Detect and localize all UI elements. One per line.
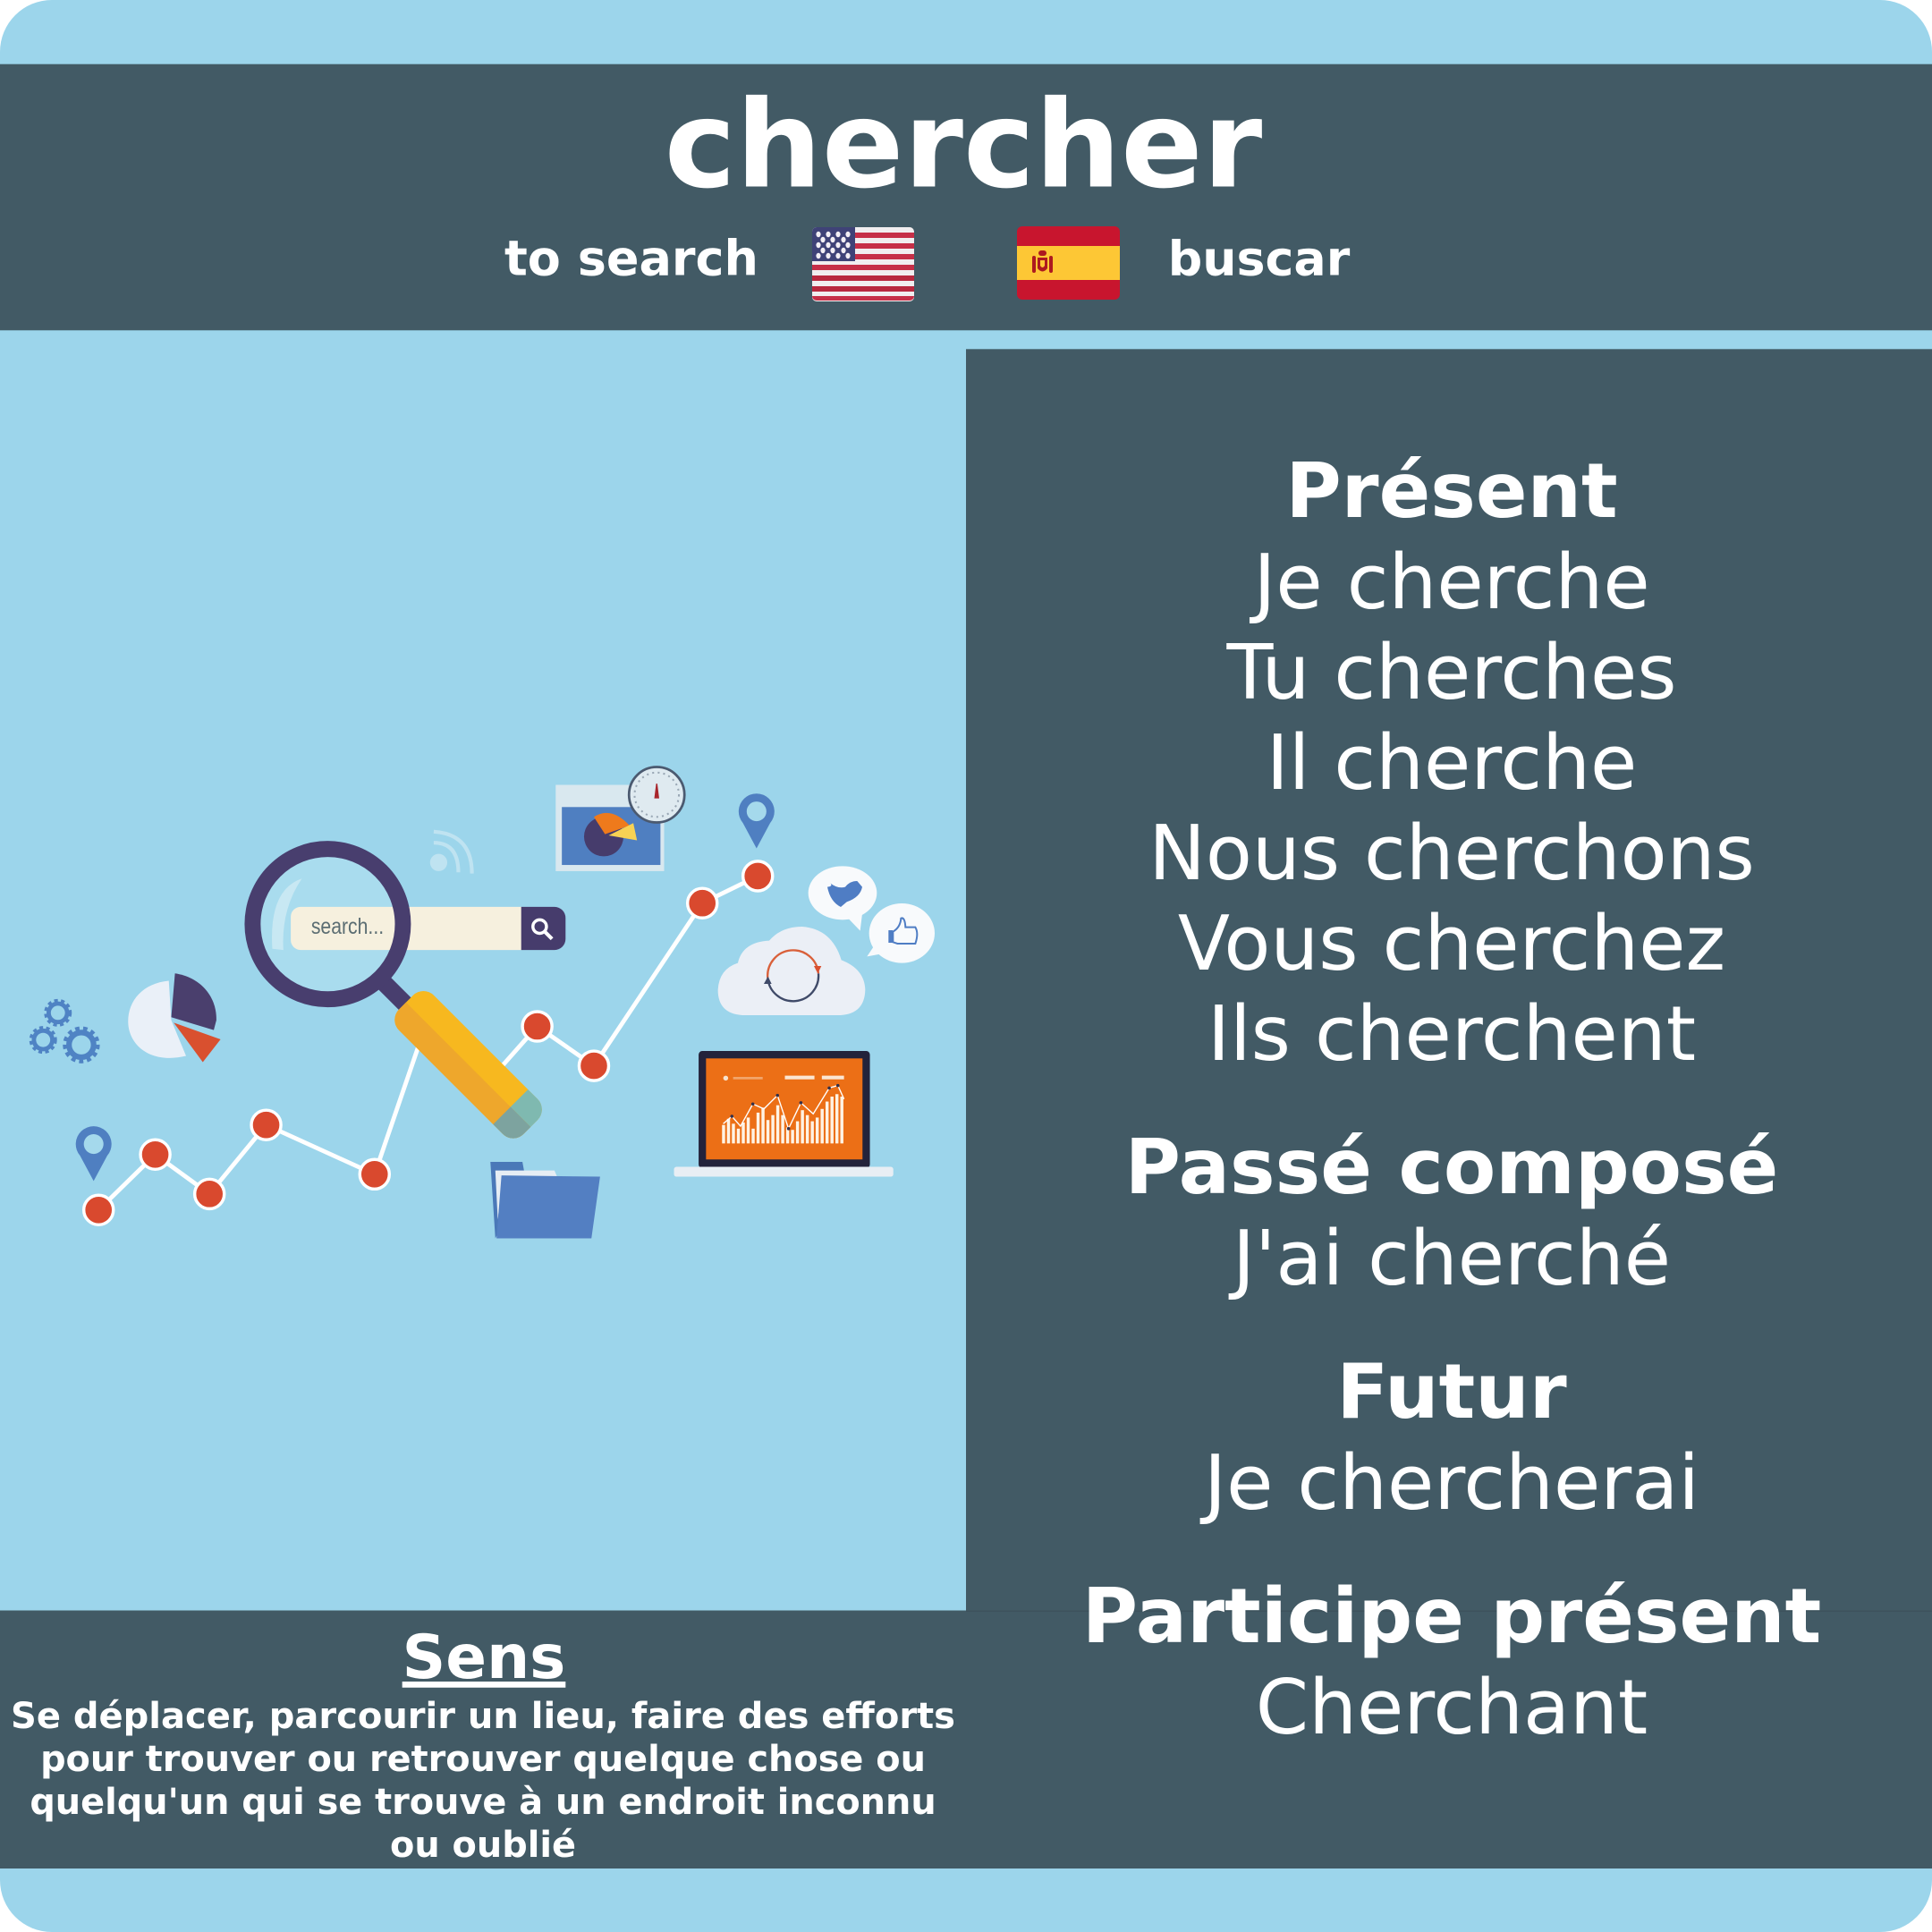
chart line left part	[98, 1045, 419, 1210]
heading: Sens: Sens	[402, 1622, 565, 1692]
panel: conjugations	[966, 349, 1932, 1868]
Spanish translation: buscar	[1168, 231, 1351, 286]
conjugation: futur	[1199, 1348, 1699, 1528]
lens highlight	[272, 878, 301, 950]
English translation: to search	[504, 231, 758, 286]
conjugation: présent: Présent	[1285, 447, 1618, 536]
conjugation: présent: Vous cherchez	[1178, 900, 1725, 988]
conjugation: présent: Je cherche	[1249, 538, 1650, 627]
icon: location pin left	[76, 1126, 112, 1181]
conjugation: participe présent: Cherchant	[1256, 1664, 1648, 1752]
search bar	[291, 907, 565, 950]
text block: definition	[11, 1696, 955, 1866]
icon: thumbs up bubble	[867, 903, 935, 963]
icon: gauge	[629, 767, 684, 823]
conjugation: passé composé: Passé composé	[1125, 1123, 1778, 1212]
conjugation: présent: Nous cherchons	[1148, 809, 1755, 898]
text block: definition: quelqu'un qui se trouve à un endroit inconnu	[30, 1782, 936, 1823]
icons: cloud and speech bubbles	[718, 866, 935, 1015]
magnifier handle neck	[377, 976, 417, 1015]
conjugation: futur: Je chercherai	[1199, 1439, 1699, 1528]
icon: folder	[490, 1162, 600, 1238]
panel: meaning background	[0, 1610, 966, 1868]
text block: definition: pour trouver ou retrouver quelque chose ou	[40, 1739, 926, 1780]
icon: gears	[30, 1001, 98, 1062]
conjugation: présent: Ils cherchent	[1208, 990, 1696, 1079]
conjugation: futur: Futur	[1336, 1348, 1567, 1436]
icon: location pin right	[739, 793, 775, 848]
chart line right part	[499, 876, 758, 1070]
conjugation: passé composé: J'ai cherché	[1228, 1215, 1671, 1303]
magnifier handle	[388, 985, 548, 1144]
icon: pie chart	[128, 973, 221, 1062]
chart points	[84, 861, 773, 1224]
search bar: search...	[311, 915, 384, 939]
magnifier ring	[252, 849, 402, 999]
conjugation: présent	[1148, 447, 1755, 1079]
conjugation: passé composé	[1125, 1123, 1778, 1303]
conjugation: présent: Il cherche	[1267, 719, 1637, 808]
icon: laptop with chart	[674, 1051, 894, 1177]
icon: bird speech bubble	[809, 866, 877, 931]
conjugation: participe présent	[1082, 1572, 1821, 1752]
header band	[0, 64, 1932, 330]
icon: Spain flag	[1017, 226, 1120, 300]
magnifier lens	[252, 849, 402, 999]
icon: wifi	[430, 832, 472, 874]
conjugation: présent: Tu cherches	[1225, 629, 1677, 717]
icon: cloud	[718, 927, 865, 1015]
title: chercher	[665, 75, 1263, 215]
icon: window with pie chart	[555, 784, 664, 871]
text block: definition: ou oublié	[390, 1825, 576, 1866]
text block: definition: Se déplacer, parcourir un lieu, faire des efforts	[11, 1696, 955, 1737]
illustration: search analytics	[30, 767, 935, 1238]
icon: US flag	[812, 227, 914, 301]
conjugation: participe présent: Participe présent	[1082, 1572, 1821, 1661]
